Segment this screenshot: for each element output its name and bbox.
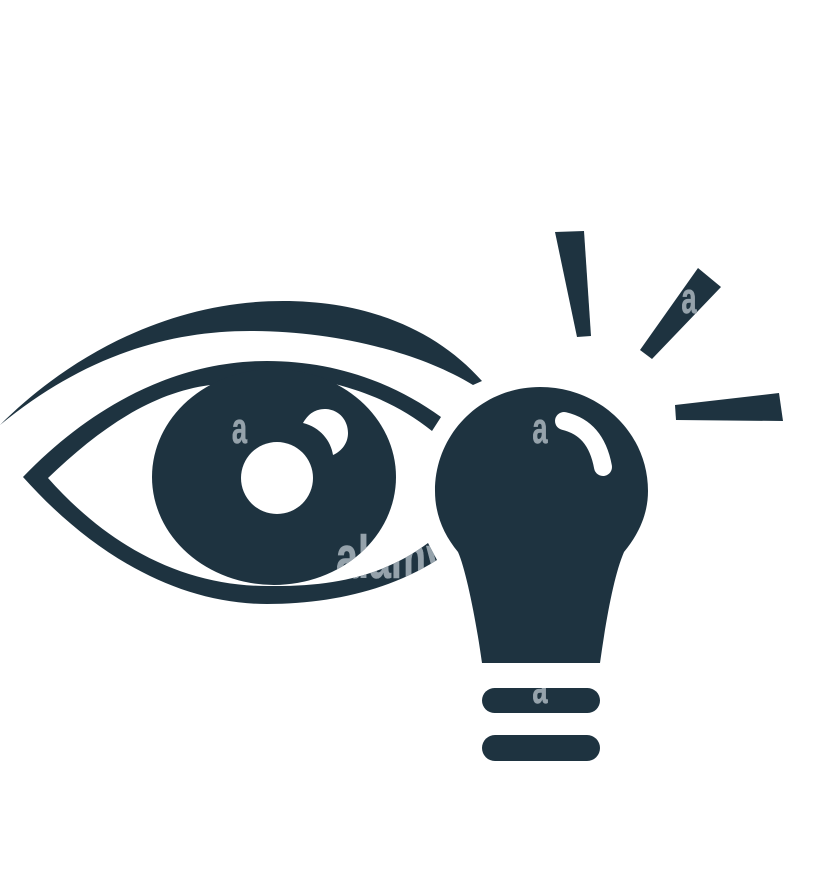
iris glint xyxy=(303,409,348,455)
light ray right xyxy=(675,393,783,421)
screw base lower bar xyxy=(482,735,600,761)
eyelid outline xyxy=(23,361,441,604)
watermark letter on base: a xyxy=(532,663,548,713)
watermark word on eye: alamy xyxy=(336,524,448,591)
watermark letter on iris: a xyxy=(232,403,248,453)
light ray top xyxy=(555,231,591,337)
screw base upper bar xyxy=(482,688,600,713)
bulb glint xyxy=(564,421,603,467)
pupil highlight xyxy=(241,442,313,514)
light ray upper right xyxy=(640,268,721,359)
watermark letter on bulb: a xyxy=(532,403,548,453)
eyebrow xyxy=(0,301,482,425)
eye icon xyxy=(0,301,482,604)
light bulb icon xyxy=(435,231,783,761)
bulb body xyxy=(435,387,648,663)
iris xyxy=(152,369,396,585)
watermark letter on ray: a xyxy=(681,273,697,323)
